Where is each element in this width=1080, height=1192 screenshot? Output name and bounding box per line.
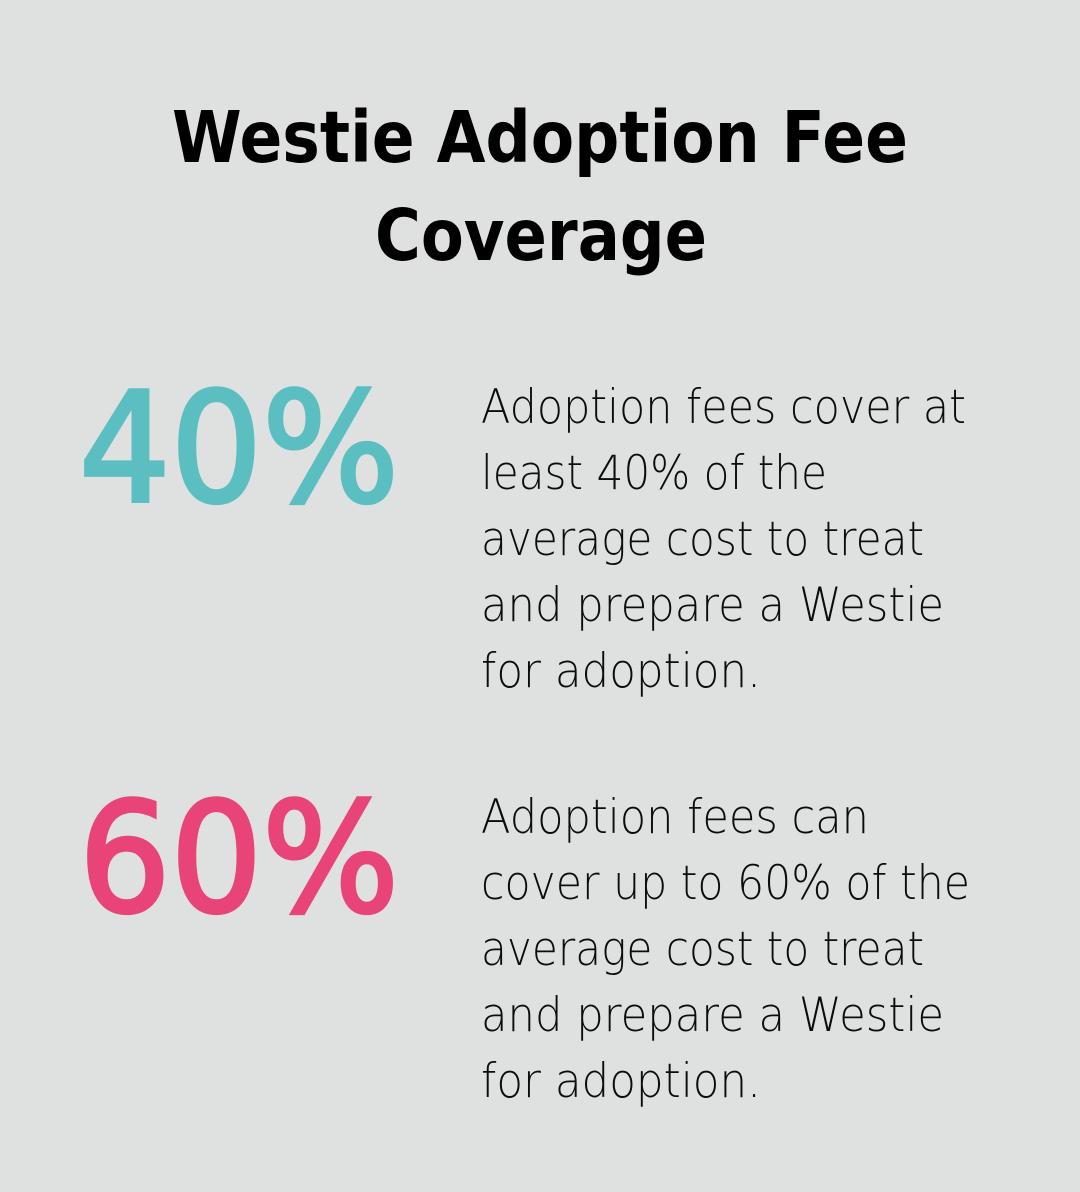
title <box>172 96 908 277</box>
text block: 60% description: and prepare a Westie <box>481 988 944 1043</box>
text block: 60% description: average cost to treat <box>481 922 924 977</box>
panel: 40% statistic <box>79 360 966 699</box>
title: Westie Adoption Fee <box>172 96 908 179</box>
text block: 40% description: least 40% of the <box>481 446 827 501</box>
text block: 40% description <box>481 380 966 699</box>
text block: 60% description <box>481 790 970 1109</box>
number: 60%: 60% <box>79 770 399 947</box>
text block: 40% description: Adoption fees cover at <box>481 380 966 435</box>
text block: 60% description: Adoption fees can <box>481 790 869 845</box>
number: 40%: 40% <box>79 360 399 537</box>
text block: 40% description: average cost to treat <box>481 512 924 567</box>
text block: 60% description: cover up to 60% of the <box>481 856 970 911</box>
panel: 60% statistic <box>79 770 970 1109</box>
text block: 40% description: and prepare a Westie <box>481 578 944 633</box>
title: Coverage <box>375 194 707 277</box>
text block: 60% description: for adoption. <box>481 1054 761 1109</box>
text block: 40% description: for adoption. <box>481 644 761 699</box>
